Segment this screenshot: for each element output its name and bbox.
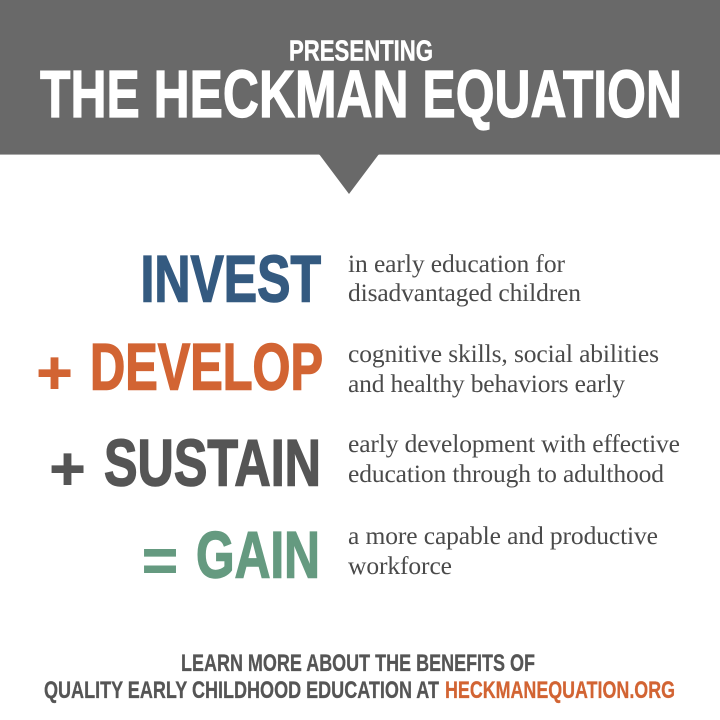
invest heading: INVEST — [140, 242, 321, 316]
footer call to action: LEARN MORE ABOUT THE BENEFITS OF — [181, 650, 535, 677]
develop description — [348, 339, 659, 398]
develop heading: DEVELOP — [90, 330, 323, 404]
develop description: cognitive skills, social abilities — [348, 339, 659, 368]
row: gain — [142, 518, 658, 594]
invest description: disadvantaged children — [348, 278, 581, 307]
header banner — [0, 0, 720, 194]
sustain heading: SUSTAIN — [104, 426, 321, 500]
row: develop — [36, 330, 659, 406]
gain description: a more capable and productive — [348, 521, 658, 550]
row: invest — [140, 242, 581, 316]
develop plus sign: + — [36, 340, 72, 406]
row: sustain — [50, 426, 680, 502]
gain description — [348, 521, 658, 580]
gain heading: GAIN — [196, 518, 320, 592]
icon: banner pointer triangle — [319, 154, 379, 194]
invest description — [348, 249, 581, 307]
gain description: workforce — [348, 551, 452, 580]
presenting label: PRESENTING — [289, 36, 433, 68]
sustain description — [348, 429, 680, 488]
develop description: and healthy behaviors early — [348, 369, 625, 398]
footer call to action: QUALITY EARLY CHILDHOOD EDUCATION AT — [44, 677, 439, 704]
invest description: in early education for — [348, 249, 566, 278]
sustain description: education through to adulthood — [348, 459, 664, 488]
footer call to action — [44, 650, 675, 704]
sustain description: early development with effective — [348, 429, 680, 458]
gain equals sign: = — [142, 527, 178, 594]
sustain plus sign: + — [50, 436, 86, 502]
